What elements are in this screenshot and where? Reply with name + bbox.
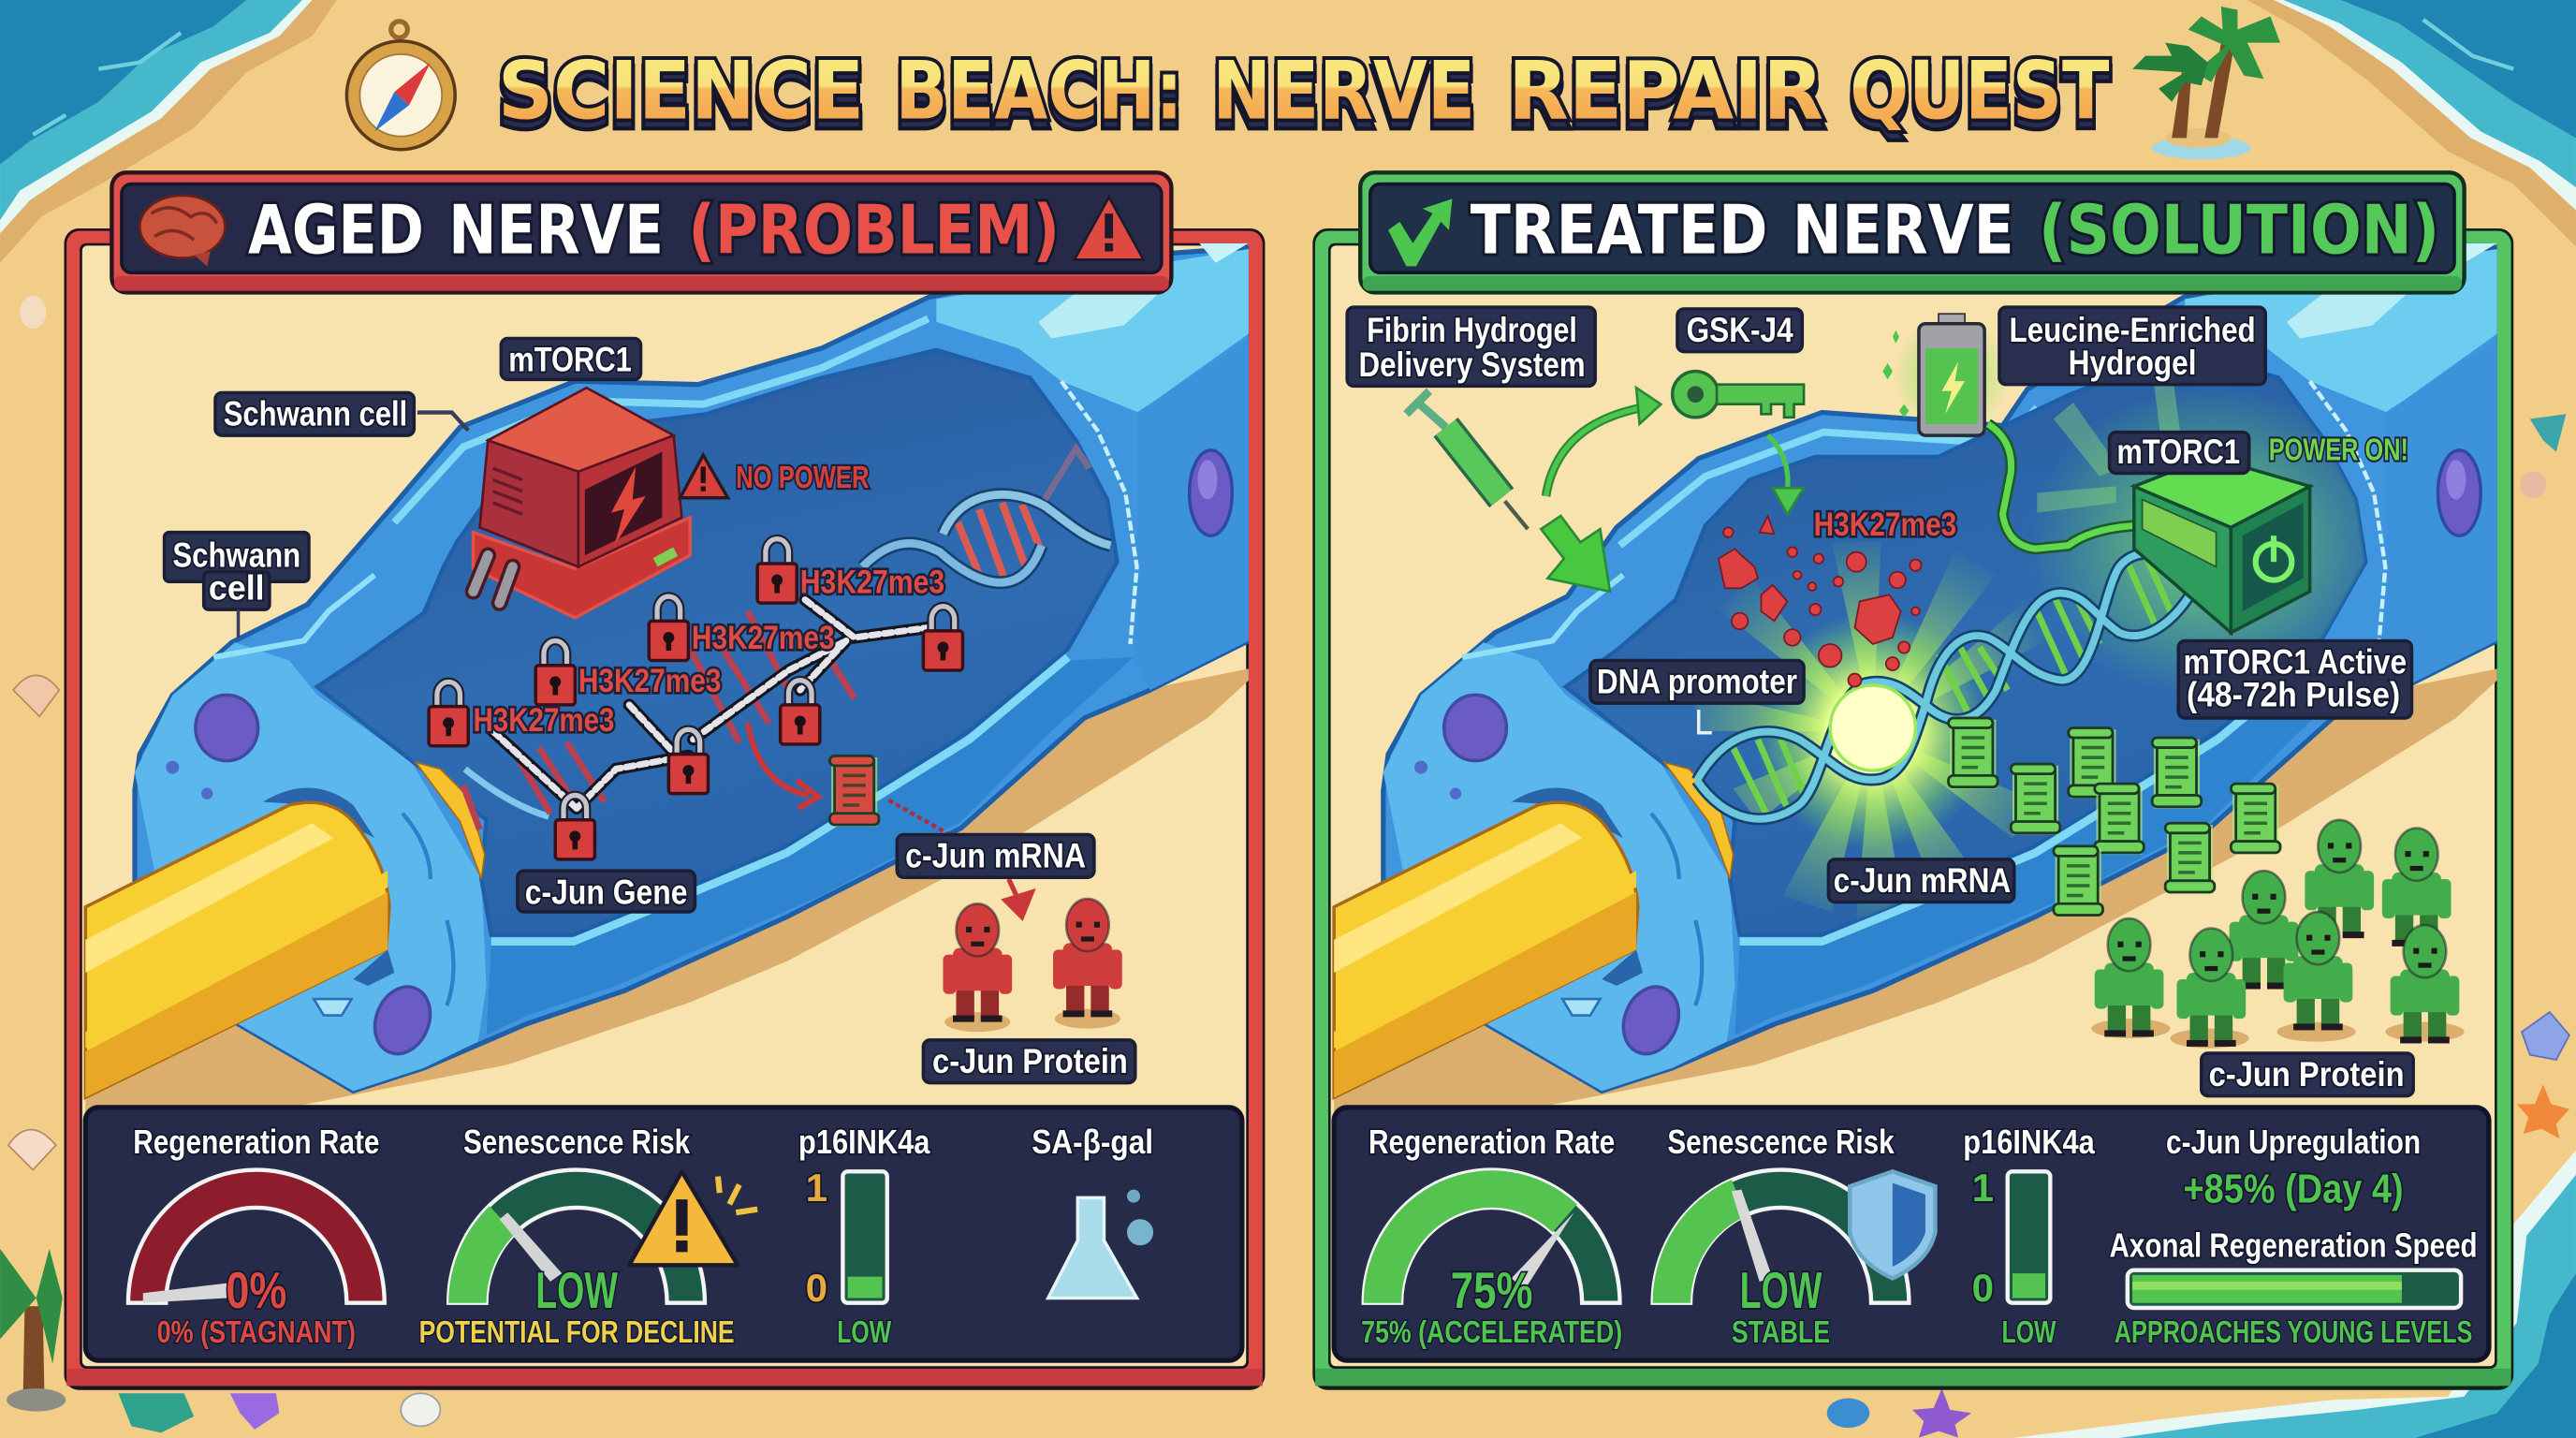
- header banner: aged nerve: NERVE: [448, 190, 664, 269]
- icon: green check arrow: [1388, 198, 1453, 266]
- gauge: regeneration rate 75%: 75% (ACCELERATED): [1361, 1315, 1622, 1350]
- gauge: senescence risk low: LOW: [535, 1262, 618, 1319]
- icon: SA-β-gal flask: SA-β-gal: [1032, 1123, 1153, 1161]
- label: c-Jun Gene: c-Jun Gene: [525, 873, 688, 911]
- H3K27me3 fragments: [1719, 516, 1922, 687]
- title: BEACH:: [896, 52, 1183, 146]
- icon: shield: [1850, 1171, 1935, 1278]
- label: Schwann cell: Schwann cell: [224, 395, 407, 433]
- H3K27me3 locks: H3K27me3: [800, 565, 944, 601]
- label: Fibrin Hydrogel Delivery System: Fibrin Hydrogel: [1367, 311, 1577, 349]
- label: Schwann cell two line: [165, 533, 309, 638]
- DNA helix: [1697, 553, 2202, 819]
- glowing promoter core: [1830, 685, 1915, 770]
- ocean: top right: [2247, 0, 2576, 246]
- label: Fibrin Hydrogel Delivery System: [1347, 307, 1595, 386]
- header banner: treated nerve: (SOLUTION): [2039, 190, 2439, 269]
- bar: p16INK4a: 1: [806, 1166, 827, 1210]
- icon: active mTORC1 machine: [2134, 457, 2310, 633]
- gauge: regeneration rate 0%: [128, 1123, 385, 1350]
- label: mTORC1 Active: mTORC1 Active: [2183, 643, 2407, 682]
- arrow: hydrogel delivery: [1541, 516, 1610, 592]
- gauge: senescence risk stable: LOW: [1740, 1262, 1822, 1319]
- bar: p16INK4a: 1: [1972, 1166, 1994, 1210]
- header banner: aged nerve: [111, 172, 1171, 292]
- chains: [493, 600, 929, 808]
- panel frame: [1312, 228, 2513, 1390]
- icon: broken mTORC1 machine: [474, 388, 690, 618]
- icon: warning: [1075, 198, 1144, 259]
- gauge: regeneration rate 75%: Regeneration Rate: [1368, 1123, 1615, 1161]
- arrow: syringe to key: [1546, 388, 1661, 496]
- c-Jun upregulation stat: c-Jun Upregulation: [2166, 1123, 2421, 1161]
- palm: bottom left: [0, 1249, 66, 1412]
- gauge: senescence risk stable: Senescence Risk: [1667, 1123, 1895, 1161]
- title: REPAIR: [1508, 52, 1823, 146]
- icon: battery: [1882, 314, 2011, 435]
- label: c-Jun Protein: c-Jun Protein: [932, 1042, 1128, 1080]
- H3K27me3 locks: H3K27me3: [578, 663, 722, 699]
- icon: palm island: [2132, 7, 2280, 159]
- panel frame: [65, 228, 1265, 1390]
- gauge: regeneration rate 75%: 75%: [1451, 1262, 1532, 1319]
- no power warning: NO POWER: [736, 461, 869, 495]
- light burst at DNA promoter: [1692, 542, 2062, 920]
- header banner: aged nerve: AGED: [248, 190, 424, 269]
- axonal regeneration speed bar: [2110, 1226, 2478, 1350]
- label: mTORC1: mTORC1: [508, 341, 632, 379]
- c-Jun upregulation stat: +85% (Day 4): [2183, 1167, 2404, 1212]
- icon: green mRNA scrolls: [1949, 718, 2280, 917]
- title: REPAIR: [1508, 44, 1823, 138]
- beach decoration: [8, 296, 2569, 1438]
- nerve illustration: [85, 243, 1265, 1114]
- icon: brain: [139, 196, 225, 266]
- title: BEACH:: [896, 44, 1183, 138]
- label: Leucine-Enriched Hydrogel: [1999, 307, 2265, 385]
- icon: compass: [346, 22, 455, 150]
- panel: treated nerve (solution): [1312, 172, 2513, 1390]
- bar: p16INK4a: 0: [1972, 1266, 1994, 1310]
- title: QUEST: [1850, 44, 2110, 138]
- bar: p16INK4a: 0: [806, 1266, 827, 1310]
- bar: p16INK4a: LOW: [837, 1315, 892, 1350]
- wire: battery to machine: [1988, 424, 2132, 549]
- bar: p16INK4a: LOW: [2002, 1315, 2056, 1350]
- green glow around machine: [2037, 386, 2365, 682]
- gauge: regeneration rate 0%: 0%: [226, 1262, 286, 1319]
- axonal regeneration speed bar: APPROACHES YOUNG LEVELS: [2115, 1315, 2472, 1350]
- panel: aged nerve (problem): [65, 172, 1265, 1390]
- axonal regeneration speed bar: Axonal Regeneration Speed: [2110, 1226, 2478, 1265]
- H3K27me3 locks: H3K27me3: [474, 702, 614, 739]
- label: c-Jun mRNA: c-Jun mRNA: [905, 837, 1086, 875]
- ocean: top left: [0, 0, 337, 263]
- arrow: key to marks: [1767, 435, 1804, 514]
- icon: syringe: [1406, 391, 1528, 529]
- gauge: senescence risk low: POTENTIAL FOR DECLINE: [419, 1315, 735, 1350]
- gauge: senescence risk stable: STABLE: [1732, 1315, 1830, 1350]
- label: c-Jun Protein: c-Jun Protein: [2209, 1055, 2405, 1093]
- label text: H3K27me3: H3K27me3: [1814, 506, 1956, 543]
- H3K27me3 locks: H3K27me3: [692, 620, 835, 656]
- header banner: aged nerve: (PROBLEM): [688, 190, 1060, 269]
- bar: p16INK4a: p16INK4a: [1963, 1123, 2096, 1161]
- bar: p16INK4a: p16INK4a: [798, 1123, 930, 1161]
- icon: SA-β-gal flask: [1032, 1123, 1153, 1298]
- label: c-Jun mRNA: c-Jun mRNA: [1834, 861, 2011, 900]
- icon: red proteins: [943, 899, 1122, 1032]
- header banner: treated nerve: TREATED: [1471, 190, 1767, 269]
- icon: green key: [1673, 372, 1804, 418]
- metrics panel: treated: [1334, 1108, 2489, 1360]
- title: SCIENCE: [498, 44, 864, 138]
- label: mTORC1 Active: [2178, 640, 2411, 718]
- title: QUEST: [1850, 52, 2110, 146]
- arrow: mRNA to protein: [889, 800, 1032, 917]
- arrow: gene to mRNA: [748, 723, 818, 808]
- gauge: regeneration rate 0%: 0% (STAGNANT): [157, 1315, 356, 1350]
- gauge: regeneration rate 75%: [1361, 1123, 1622, 1350]
- metrics panel: aged: [85, 1108, 1242, 1360]
- gauge: senescence risk low: [419, 1123, 757, 1350]
- label: mTORC1: mTORC1: [2116, 433, 2240, 471]
- power on text: POWER ON!: [2269, 433, 2408, 467]
- bar: p16INK4a: [798, 1123, 930, 1350]
- gauge: senescence risk stable: [1653, 1123, 1935, 1350]
- nerve illustration: [1334, 243, 2513, 1114]
- gauge: senescence risk low: Senescence Risk: [463, 1123, 691, 1161]
- label: mTORC1 Active: (48-72h Pulse): [2187, 676, 2400, 714]
- bar: p16INK4a: [1963, 1123, 2096, 1350]
- icon: green proteins: [2091, 820, 2465, 1049]
- no power warning: [681, 455, 869, 498]
- title: SCIENCE: [498, 52, 864, 146]
- H3K27me3 locks: [429, 539, 963, 859]
- label: Fibrin Hydrogel Delivery System: Delivery System: [1358, 345, 1586, 384]
- label: Schwann cell two line: cell: [209, 569, 265, 608]
- label: Leucine-Enriched Hydrogel: Hydrogel: [2069, 344, 2197, 382]
- gauge: regeneration rate 0%: Regeneration Rate: [133, 1123, 379, 1161]
- icon: warning triangle: [629, 1171, 757, 1265]
- title: [498, 44, 2110, 146]
- title: NERVE: [1212, 44, 1475, 138]
- c-Jun upregulation stat: [2166, 1123, 2421, 1212]
- label: Leucine-Enriched Hydrogel: Leucine-Enriched: [2009, 311, 2256, 349]
- header banner: treated nerve: [1360, 172, 2465, 292]
- label: DNA promoter: DNA promoter: [1597, 663, 1797, 701]
- label: Schwann cell two line: Schwann: [172, 536, 300, 574]
- DNA helix: [463, 448, 1110, 829]
- icon: red mRNA scroll: [829, 756, 879, 827]
- header banner: treated nerve: NERVE: [1793, 190, 2014, 269]
- label: DNA promoter: [1590, 661, 1804, 733]
- ocean: bottom right: [2012, 1151, 2576, 1438]
- label: GSK-J4: GSK-J4: [1687, 311, 1793, 349]
- title: NERVE: [1212, 52, 1475, 146]
